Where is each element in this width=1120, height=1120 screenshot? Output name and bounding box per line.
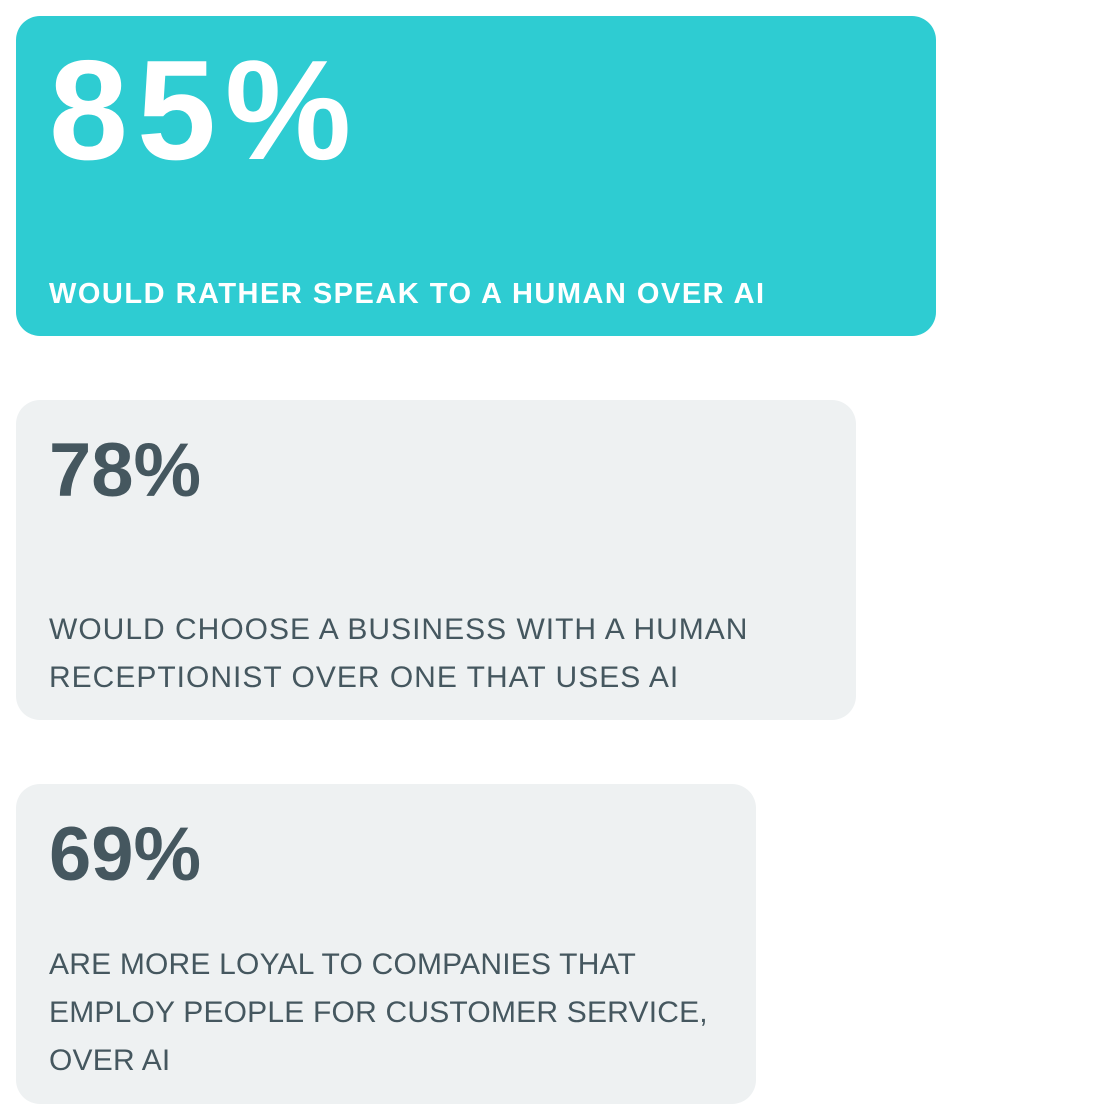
panel: 78% stat bbox=[16, 400, 856, 720]
caption 85%: WOULD RATHER SPEAK TO A HUMAN OVER AI bbox=[49, 278, 766, 310]
caption 69%: EMPLOY PEOPLE FOR CUSTOMER SERVICE, bbox=[49, 996, 708, 1029]
caption 69%: OVER AI bbox=[49, 1044, 170, 1077]
caption 78% bbox=[49, 613, 748, 694]
panel: 85% stat bbox=[16, 16, 936, 336]
big number 69%: 69% bbox=[49, 812, 201, 897]
panel: 69% stat bbox=[16, 784, 756, 1104]
big number 85%: 85% bbox=[49, 31, 360, 190]
caption 69%: ARE MORE LOYAL TO COMPANIES THAT bbox=[49, 948, 636, 981]
caption 69% bbox=[49, 948, 708, 1077]
caption 78%: WOULD CHOOSE A BUSINESS WITH A HUMAN bbox=[49, 613, 748, 646]
big number 78%: 78% bbox=[49, 428, 201, 513]
caption 78%: RECEPTIONIST OVER ONE THAT USES AI bbox=[49, 661, 679, 694]
